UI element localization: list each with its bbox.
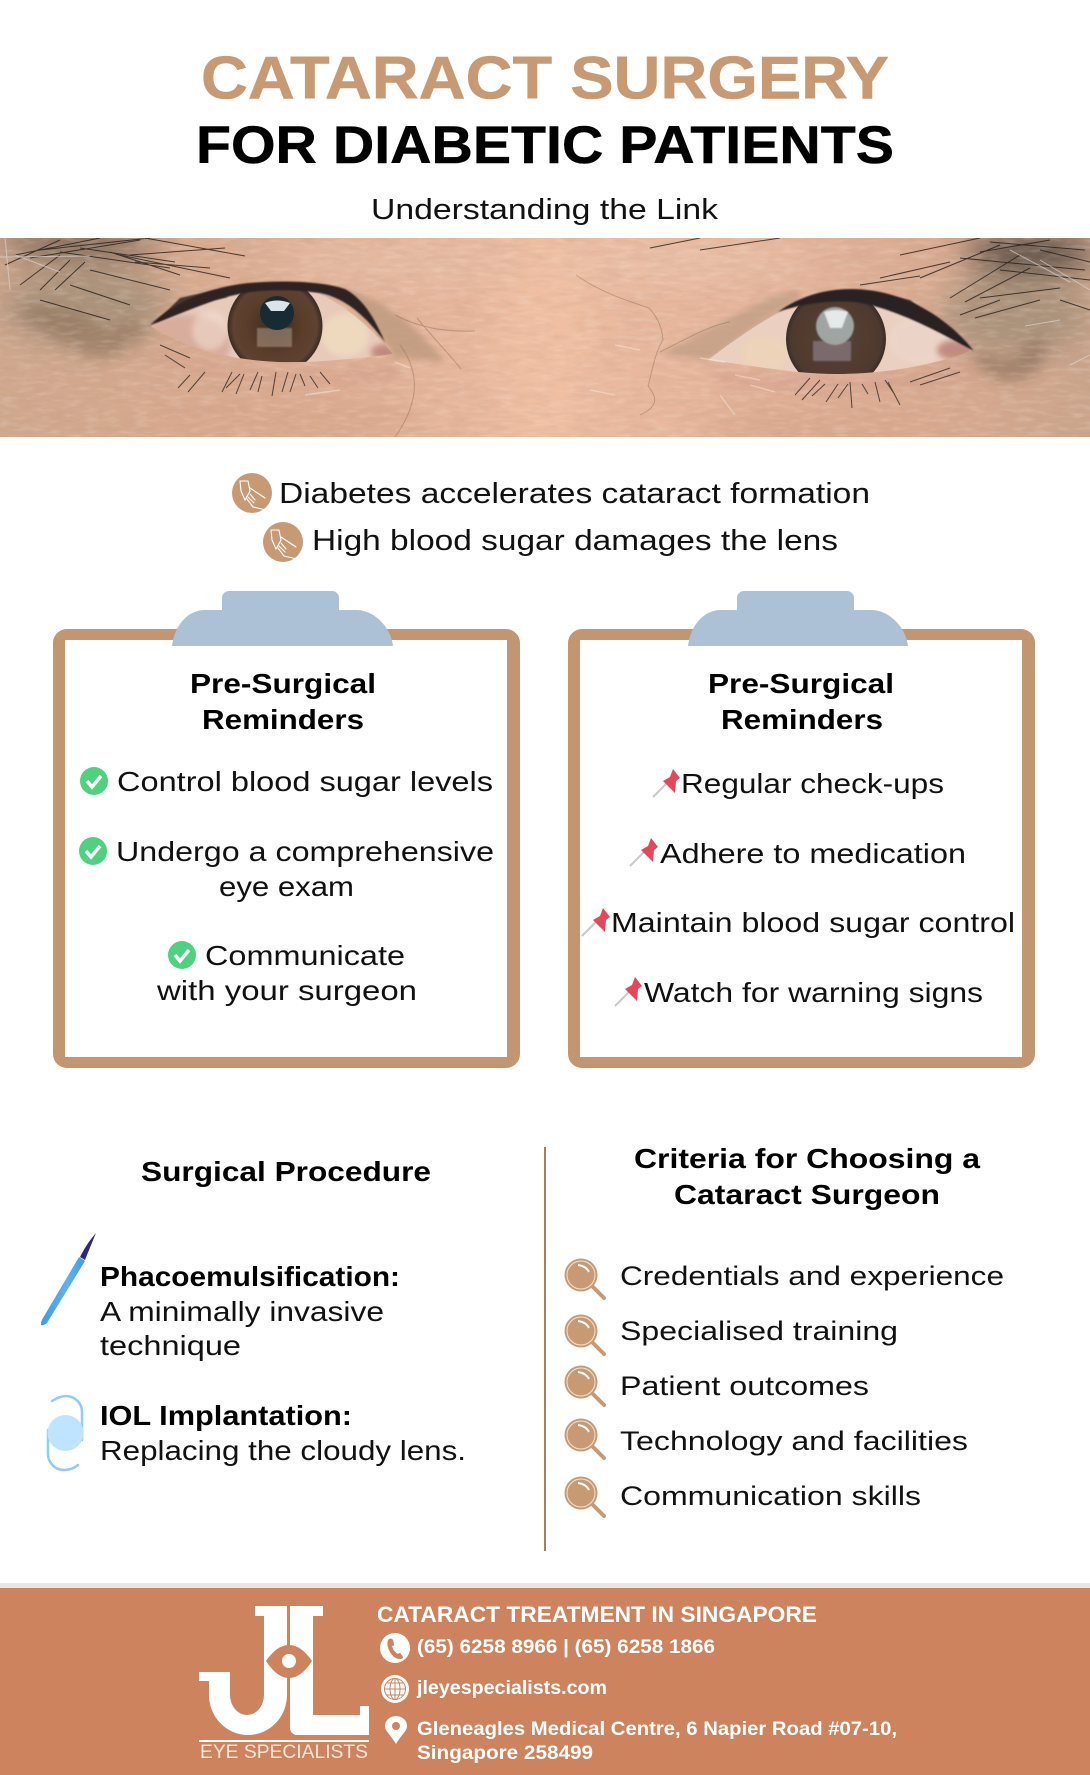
- criterion: patient outcomes: Patient outcomes: [620, 1371, 869, 1401]
- criterion: technology and facilities: [564, 1418, 968, 1458]
- section: surgical procedure: [41, 1156, 466, 1470]
- panel heading: [708, 668, 894, 735]
- item: adhere to medication: Adhere to medication: [660, 838, 966, 869]
- phacoemulsification text: Phacoemulsification:: [100, 1261, 400, 1292]
- item: maintain blood sugar control: Maintain blood sugar control: [611, 907, 1015, 938]
- criterion: credentials and experience: Credentials and experience: [620, 1261, 1004, 1291]
- item: comprehensive eye exam: Undergo a comprehensive: [116, 836, 494, 867]
- footer heading: CATARACT TREATMENT IN SINGAPORE: [377, 1602, 817, 1627]
- key fact: diabetes accelerates cataract formation: [232, 473, 870, 513]
- section heading: Criteria for Choosing a: [634, 1143, 980, 1174]
- photo: close-up of eyes with cataract: [0, 234, 1090, 455]
- phone contact: (65) 6258 8966 | (65) 6258 1866: [417, 1637, 715, 1658]
- phacoemulsification text: A minimally invasive: [100, 1296, 384, 1327]
- right eye: [708, 288, 974, 374]
- panel: pre-surgical reminders clipboard (checklist): [53, 591, 520, 1068]
- criterion: communication skills: Communication skills: [620, 1481, 921, 1511]
- lashes and brow hairs: [5, 238, 1090, 320]
- website contact: [381, 1675, 607, 1703]
- eyelid folds: [330, 288, 803, 362]
- address contact: [385, 1716, 897, 1764]
- criterion: specialised training: Specialised training: [620, 1316, 898, 1346]
- clipboard clip: [172, 591, 393, 646]
- panel heading: [190, 668, 376, 735]
- title line: cataract surgery: CATARACT SURGERY: [201, 44, 889, 112]
- upper lash band: [149, 281, 385, 342]
- clipboard clip: [688, 591, 908, 646]
- panel: pre-surgical reminders clipboard (pinned list): [568, 591, 1035, 1068]
- clipboard frame: [568, 629, 1035, 1068]
- criterion: patient outcomes: [564, 1366, 869, 1405]
- fact text: High blood sugar damages the lens: [312, 525, 838, 557]
- section heading: Surgical Procedure: [141, 1156, 431, 1187]
- criterion: communication skills: [564, 1476, 921, 1516]
- section heading: Cataract Surgeon: [674, 1179, 940, 1210]
- item: comprehensive eye exam: [79, 836, 494, 902]
- subtitle: Understanding the Link: [371, 194, 719, 226]
- panel heading: Pre-Surgical: [708, 668, 894, 699]
- item: regular check-ups: Regular check-ups: [681, 768, 944, 799]
- phacoemulsification text: technique: [100, 1330, 241, 1361]
- item: control blood sugar levels: Control blood sugar levels: [117, 766, 493, 797]
- logo: JL eye specialists: EYE SPECIALISTS: [200, 1742, 368, 1763]
- section heading: [634, 1143, 980, 1210]
- criterion: specialised training: [564, 1314, 898, 1354]
- clipboard frame: [53, 629, 520, 1068]
- panel heading: Reminders: [202, 704, 364, 735]
- title: [196, 44, 894, 175]
- icon: hand holding eye dropper: [263, 522, 303, 562]
- fact text: Diabetes accelerates cataract formation: [279, 478, 870, 510]
- phacoemulsification text: [100, 1261, 400, 1361]
- iol implantation text: IOL Implantation:: [100, 1400, 352, 1431]
- address contact: Singapore 258499: [417, 1743, 593, 1764]
- key fact: high blood sugar damages the lens: [263, 522, 838, 562]
- item: watch for warning signs: Watch for warning signs: [644, 977, 983, 1008]
- item: communicate with your surgeon: with your surgeon: [156, 975, 417, 1006]
- criterion: credentials and experience: [564, 1258, 1004, 1298]
- panel heading: Pre-Surgical: [190, 668, 376, 699]
- icon: phaco needle instrument: [41, 1233, 96, 1325]
- logo: JL eye specialists: [199, 1606, 369, 1763]
- left eye: [149, 280, 392, 362]
- icon: intraocular lens: [48, 1396, 84, 1470]
- phone contact: [380, 1633, 715, 1663]
- title line: for diabetic patients: FOR DIABETIC PATIENTS: [196, 116, 894, 175]
- section: criteria for choosing a cataract surgeon: [564, 1143, 1004, 1516]
- address contact: Gleneagles Medical Centre, 6 Napier Road #07-10,: [417, 1719, 897, 1740]
- icon: hand holding eye dropper: [232, 473, 272, 513]
- item: comprehensive eye exam: eye exam: [219, 871, 354, 902]
- iol implantation text: Replacing the cloudy lens.: [100, 1435, 466, 1466]
- footer: [0, 1588, 1090, 1775]
- website contact: jleyespecialists.com: [416, 1678, 607, 1699]
- item: communicate with your surgeon: Communicate: [205, 940, 405, 971]
- criterion: technology and facilities: Technology and facilities: [620, 1426, 968, 1456]
- iol implantation text: [100, 1400, 466, 1466]
- skin wrinkle texture: [381, 240, 1040, 430]
- panel heading: Reminders: [721, 704, 883, 735]
- item: communicate with your surgeon: [156, 940, 417, 1006]
- upper lash band: [778, 289, 974, 351]
